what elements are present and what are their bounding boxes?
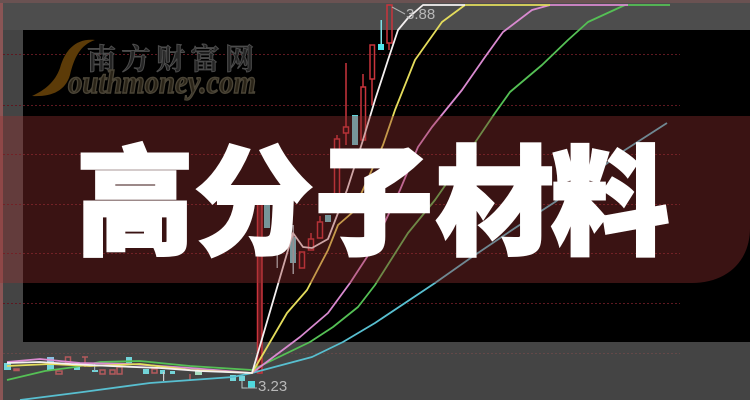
grid lines <box>3 54 680 354</box>
black chart panel <box>23 30 750 342</box>
high price label <box>392 6 435 23</box>
blue MA <box>20 123 667 400</box>
white MA <box>7 5 465 373</box>
logo: southmoney watermark <box>32 37 256 101</box>
top red axis stripe <box>0 0 750 3</box>
high price label: 3.88 <box>406 6 435 23</box>
logo swoosh S <box>32 40 95 96</box>
low price label: 3.23 <box>258 378 287 395</box>
rally candles <box>258 5 392 373</box>
red title band <box>0 116 750 283</box>
base candles <box>14 357 190 381</box>
low point marker <box>242 381 247 388</box>
candlestick chart <box>4 5 392 388</box>
top lighter gray strip <box>0 0 750 30</box>
pink MA <box>7 5 628 373</box>
logo chinese name: 南方财富网 <box>87 37 254 78</box>
logo latin name: outhmoney.com <box>68 65 256 101</box>
cyan candles <box>264 20 384 274</box>
left red axis stripe <box>0 0 3 400</box>
title: 高分子材料 <box>76 139 669 271</box>
yellow MA <box>7 5 550 373</box>
